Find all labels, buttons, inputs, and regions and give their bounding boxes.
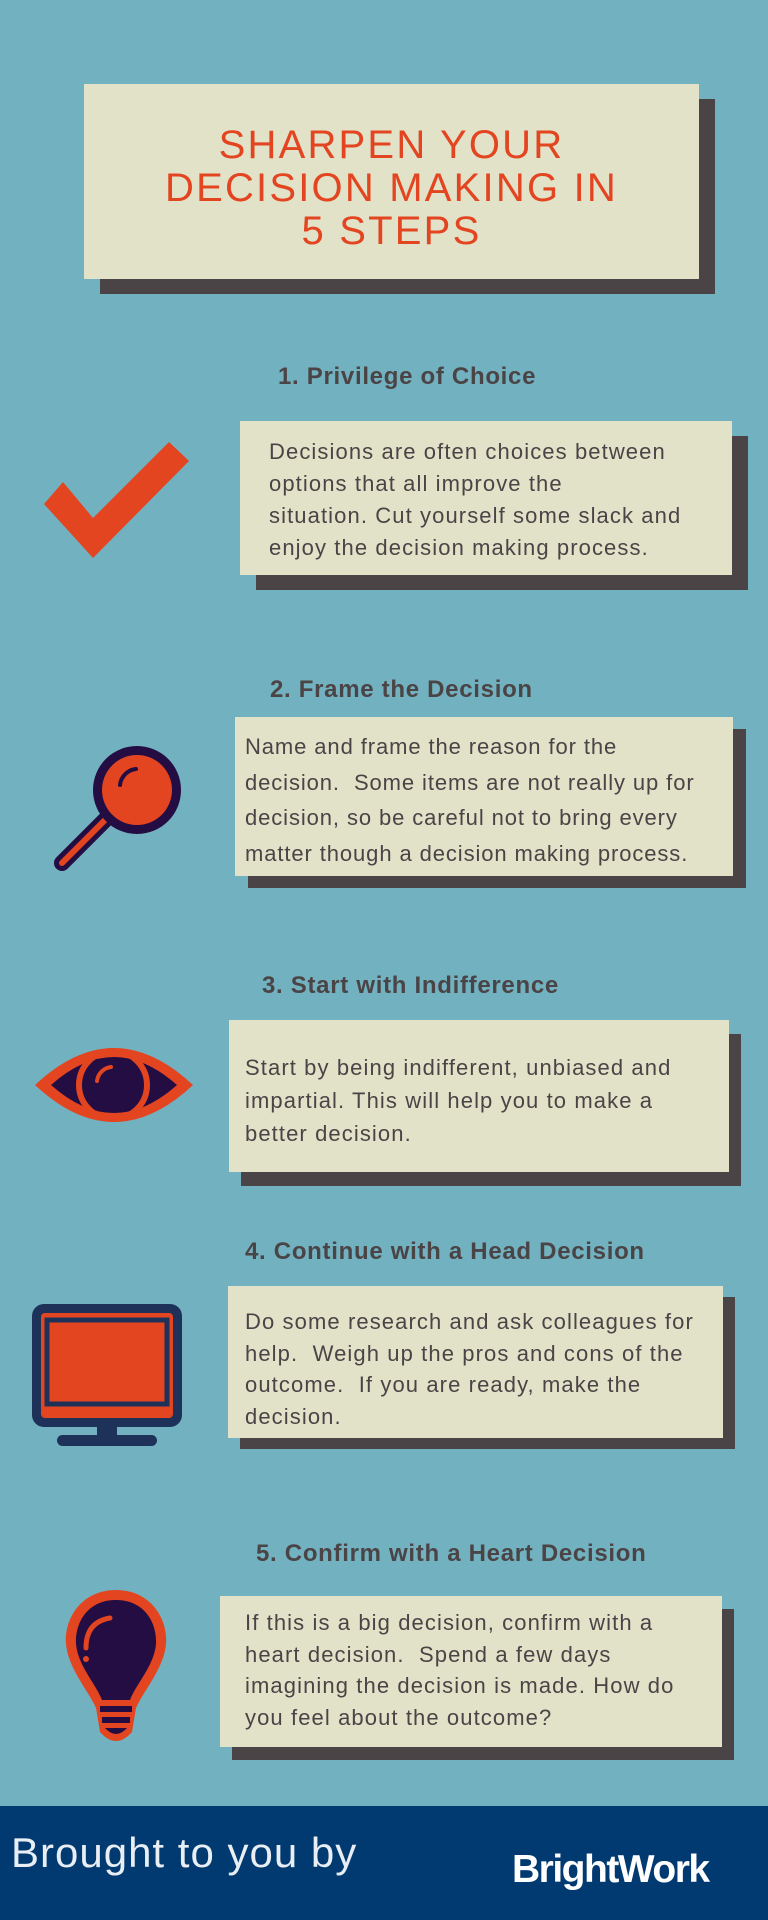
icon: monitor xyxy=(32,1304,182,1446)
title text xyxy=(165,123,618,253)
title box xyxy=(84,84,699,279)
card 4 text: decision. xyxy=(245,1404,342,1429)
card 3 text: impartial. This will help you to make a xyxy=(245,1088,653,1113)
footer xyxy=(0,1806,768,1920)
logo: BrightWork: BrightWork xyxy=(512,1848,709,1891)
card 2 text: decision, so be careful not to bring every xyxy=(245,805,678,830)
card 5 text: heart decision. Spend a few days xyxy=(245,1642,612,1667)
card 1 xyxy=(240,421,732,575)
card 4 text: help. Weigh up the pros and cons of the xyxy=(245,1341,684,1366)
card 1 text: enjoy the decision making process. xyxy=(269,535,649,560)
card 5 text xyxy=(245,1610,674,1730)
card 1 text: options that all improve the xyxy=(269,471,563,496)
card 3 text xyxy=(245,1055,671,1146)
icon: check mark xyxy=(44,442,189,558)
icon: eye xyxy=(35,1048,193,1122)
card 1 text: Decisions are often choices between xyxy=(269,439,666,464)
title text: SHARPEN YOUR xyxy=(219,123,564,167)
card 3 text: Start by being indifferent, unbiased and xyxy=(245,1055,671,1080)
card 2 text xyxy=(245,734,695,866)
heading 4: 4. Continue with a Head Decision xyxy=(245,1238,645,1265)
icon: light bulb xyxy=(66,1590,166,1741)
card 2 text: decision. Some items are not really up for xyxy=(245,770,695,794)
card 2 text: matter though a decision making process. xyxy=(245,840,688,866)
card 5 text: imagining the decision is made. How do xyxy=(245,1673,674,1698)
icon: magnifier xyxy=(54,746,181,871)
card 5 xyxy=(220,1596,722,1747)
title text: 5 STEPS xyxy=(302,209,481,253)
card 5 text: If this is a big decision, confirm with a xyxy=(245,1610,653,1635)
card 4 text: outcome. If you are ready, make the xyxy=(245,1372,641,1397)
card 2 text: Name and frame the reason for the xyxy=(245,734,617,759)
card 4 text: Do some research and ask colleagues for xyxy=(245,1309,694,1334)
heading 3: 3. Start with Indifference xyxy=(262,972,559,999)
footer text: Brought to you by xyxy=(11,1829,357,1876)
title text: DECISION MAKING IN xyxy=(165,166,618,210)
card 1 text: situation. Cut yourself some slack and xyxy=(269,503,681,528)
card 4 xyxy=(228,1286,723,1438)
card 5 text: you feel about the outcome? xyxy=(245,1705,552,1730)
card 2 xyxy=(235,717,733,876)
card 3 text: better decision. xyxy=(245,1121,412,1146)
heading 1: 1. Privilege of Choice xyxy=(278,363,536,390)
card 4 text xyxy=(245,1309,694,1429)
card 1 text xyxy=(269,439,681,560)
heading 5: 5. Confirm with a Heart Decision xyxy=(256,1540,646,1567)
card 3 xyxy=(229,1020,729,1172)
heading 2: 2. Frame the Decision xyxy=(270,676,533,703)
